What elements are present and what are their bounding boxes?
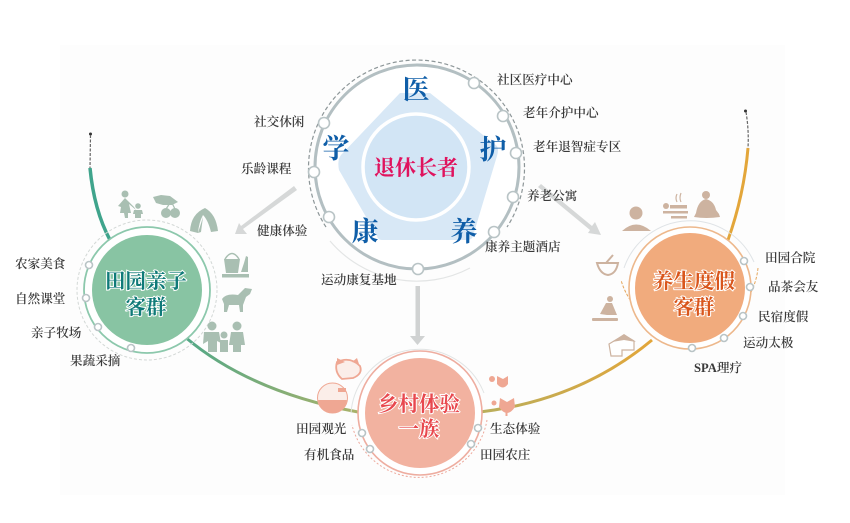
- labels: wellness group: SPA理疗: [694, 360, 742, 375]
- rural nodes: [358, 424, 482, 452]
- pillar: 学: 学: [322, 134, 350, 164]
- connecting arc: green to olive segment: [185, 337, 358, 412]
- centre title: 退休长者: [374, 156, 458, 180]
- panel: rural group: [351, 349, 487, 477]
- panel: family group: [77, 220, 217, 360]
- labels: central circle services: 运动康复基地: [321, 272, 397, 287]
- arrow: to family group: [235, 186, 297, 234]
- panel: wellness group: 客群: [674, 295, 715, 319]
- labels: central circle services: 社交休闲: [254, 114, 304, 129]
- labels: central circle services: 老年介护中心: [523, 105, 600, 120]
- labels: rural group: 有机食品: [304, 447, 355, 462]
- labels: family group: 农家美食: [15, 256, 66, 271]
- labels: central circle services: 老年退智症专区: [533, 139, 622, 154]
- panel: rural group: 一族: [398, 418, 440, 441]
- labels: rural group: 田园观光: [296, 421, 347, 436]
- icon: family of three: [203, 322, 245, 352]
- ring nodes: [308, 78, 522, 274]
- icon: massage: [592, 296, 618, 321]
- icon: parent and child: [118, 190, 143, 218]
- icon: hand and cherries: [153, 195, 180, 218]
- arrow: to rural group: [410, 286, 425, 345]
- solid ring: [315, 65, 519, 269]
- connecting arc: gold lower segment: [480, 340, 652, 412]
- labels: rural group: [296, 421, 541, 462]
- pillar: 养: 养: [450, 217, 478, 247]
- pillar: 护: 护: [480, 135, 506, 165]
- labels: rural group: 生态体验: [490, 421, 541, 436]
- connecting arc: right dashed tip: [744, 110, 748, 148]
- labels: family group: [15, 256, 121, 368]
- arrow: to wellness group: [538, 184, 601, 235]
- labels: central circle services: 康养主题酒店: [485, 239, 561, 254]
- icon: flower small: [489, 376, 508, 388]
- labels: wellness group: 民宿度假: [758, 310, 809, 324]
- icon: hot stone: [663, 193, 688, 218]
- labels: central circle services: [241, 72, 622, 287]
- wellness title: 养生度假: [653, 269, 735, 293]
- connecting arc: left dashed tip: [89, 132, 92, 168]
- connecting arc: teal segment: [90, 168, 110, 240]
- labels: wellness group: 田园合院: [765, 250, 816, 265]
- icon: sheep: [222, 288, 252, 312]
- family nodes: [82, 262, 134, 352]
- panel: wellness group: [621, 221, 758, 352]
- labels: wellness group: 运动太极: [743, 335, 794, 350]
- family title: 田园亲子: [105, 270, 187, 293]
- labels: central circle services: 乐龄课程: [241, 161, 292, 176]
- labels: family group: 果蔬采摘: [70, 353, 121, 368]
- labels: family group: 亲子牧场: [31, 325, 82, 340]
- icon: flower large: [492, 398, 515, 416]
- labels: central circle services: 养老公寓: [527, 188, 578, 203]
- icon: face massage: [622, 206, 651, 231]
- pillar: 医: 医: [402, 75, 430, 105]
- panel: central health circle: [308, 60, 524, 281]
- labels: rural group: 田园农庄: [480, 447, 531, 462]
- icon: cow: [336, 358, 361, 379]
- panel: family group: 客群: [126, 295, 167, 319]
- lower thin arc: [330, 241, 470, 281]
- wellness nodes: [688, 258, 754, 352]
- icon: meditation: [694, 191, 720, 218]
- labels: central circle services: 社区医疗中心: [497, 72, 574, 87]
- icon: bucket and spade: [222, 254, 249, 278]
- labels: wellness group: 品茶会友: [768, 279, 819, 294]
- pillar: 康: 康: [352, 217, 378, 247]
- icon: farmhouse: [609, 334, 636, 356]
- icon: mortar and pestle: [597, 255, 618, 275]
- labels: central circle services: 健康体验: [257, 223, 308, 238]
- outer dashed ring: [309, 60, 524, 227]
- pentagon: [338, 93, 498, 240]
- icon: farm field: [318, 383, 348, 413]
- rural title: 乡村体验: [378, 392, 460, 416]
- connecting arc: gold upper segment: [728, 148, 748, 240]
- labels: wellness group: [694, 250, 819, 375]
- icon: tent: [190, 208, 218, 233]
- labels: family group: 自然课堂: [15, 291, 66, 306]
- inner ring: [363, 114, 469, 220]
